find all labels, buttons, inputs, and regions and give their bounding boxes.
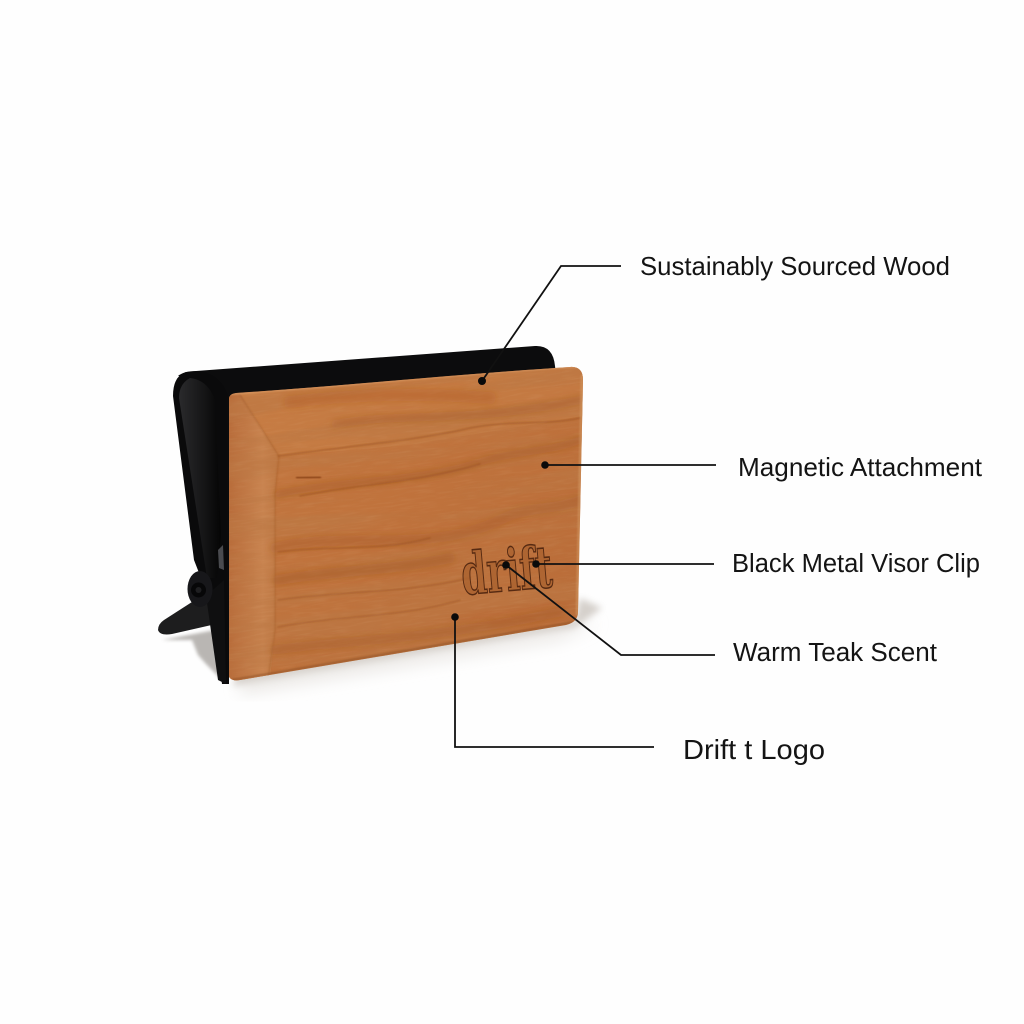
top bevel	[294, 367, 583, 416]
callout: Drift t Logo: Drift t Logo	[683, 734, 825, 765]
product: wooden diffuser on black visor clip	[158, 346, 602, 696]
clip side	[173, 371, 229, 684]
callout: Warm Teak Scent: Warm Teak Scent	[733, 639, 937, 667]
pivot screw	[188, 571, 212, 607]
callout: Black Metal Visor Clip: Black Metal Visor Clip	[732, 550, 980, 578]
engraved drift logo: drift	[458, 533, 555, 609]
wood left edge contact line	[227, 398, 229, 680]
callout: Sustainably Sourced Wood: Sustainably Sourced Wood	[640, 251, 950, 281]
pore texture	[167, 294, 653, 755]
cast shadows	[162, 598, 602, 694]
callout: Sustainably Sourced Wood	[478, 251, 950, 385]
bevel edge shading	[229, 366, 582, 680]
procedural grain	[262, 366, 583, 658]
callout: Black Metal Visor Clip	[532, 550, 980, 578]
thin grain lines	[278, 418, 580, 627]
callout: Warm Teak Scent	[502, 561, 937, 667]
callout: Magnetic Attachment	[541, 452, 983, 482]
clip top band	[178, 346, 556, 400]
callout: Magnetic Attachment: Magnetic Attachment	[738, 452, 983, 482]
broad grain bands	[275, 395, 580, 650]
wood block	[228, 366, 583, 680]
left bevel	[229, 394, 274, 680]
clip edge highlight	[218, 545, 224, 570]
callout: Drift t Logo	[451, 613, 825, 765]
clip foot	[158, 590, 216, 634]
dark knot streak	[296, 477, 321, 478]
black visor clip	[158, 346, 556, 684]
clip lower arm	[206, 580, 226, 684]
